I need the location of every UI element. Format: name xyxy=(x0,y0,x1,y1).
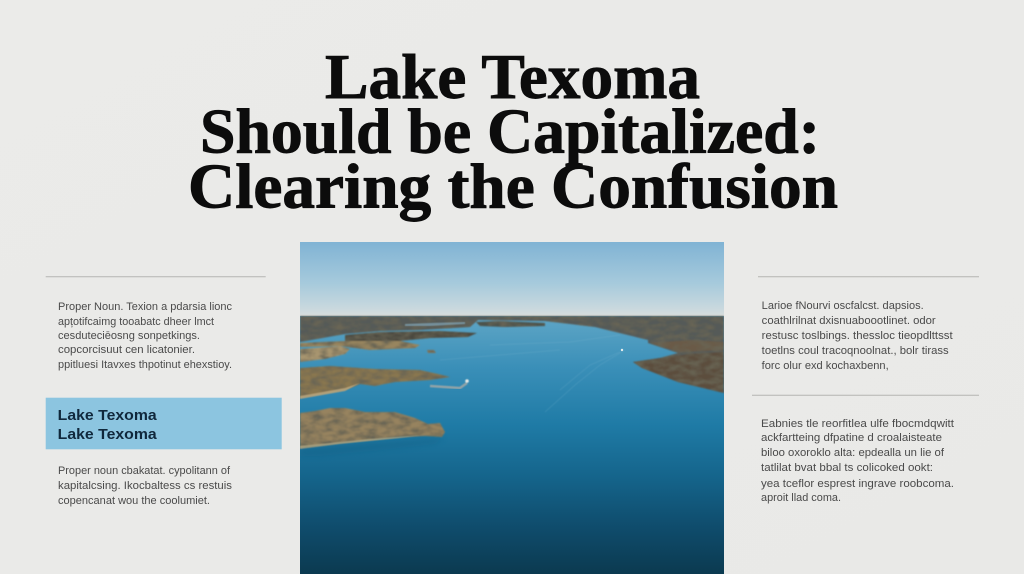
reflections xyxy=(300,436,440,449)
text block: lower right: Eabnies tle reorfitlea ulfe fbocmdqwitt xyxy=(761,418,954,430)
callout: Lake Texoma xyxy=(46,398,282,449)
photo: aerial view of Lake Texoma xyxy=(300,242,724,574)
text block: capitalization note: Proper noun cbakatat. cypolitann of xyxy=(58,465,231,477)
text block: upper right: coathlrilnat dxisnuaboootlinet. odor xyxy=(762,315,936,327)
text block: lower right: tatlilat bvat bbal ts colicoked ookt: xyxy=(761,462,933,474)
text block: capitalization note: kapitalcsing. Ikocbaltess cs restuis xyxy=(58,480,233,492)
sky xyxy=(300,242,724,317)
text block: lower right: ackfartteing dfpatine d croalaisteate xyxy=(761,432,942,444)
text block: lower right: aproit llad coma. xyxy=(761,492,841,504)
title: Lake Texoma xyxy=(325,42,700,112)
text block: proper noun introduction: cesduteciēosng sonpetkings. xyxy=(58,330,200,342)
text block: upper right: Larioe fNourvi oscfalcst. dapsios. xyxy=(762,300,924,312)
dock xyxy=(430,379,469,388)
text block: lower right xyxy=(761,418,954,504)
callout: Lake Texoma: Lake Texoma xyxy=(58,426,157,443)
title: Clearing the Confusion xyxy=(188,152,838,222)
island: middle left xyxy=(300,366,450,398)
text block: upper right: forc olur exd kochaxbenn, xyxy=(762,360,889,372)
text block: upper right: restusc toslbings. thessloc tieopdlttsst xyxy=(762,330,953,342)
title xyxy=(188,42,838,222)
callout: Lake Texoma: Lake Texoma xyxy=(58,407,157,424)
panel: left column xyxy=(46,277,282,507)
panel: right column xyxy=(752,277,979,504)
text block: lower right: yea tceflor esprest ingrave roobcoma. xyxy=(761,478,954,490)
text block: upper right xyxy=(762,300,953,372)
distant and right shore xyxy=(300,316,724,448)
water xyxy=(300,316,724,574)
text block: proper noun introduction: apțotifcaimg tooabatc dheer lmct xyxy=(58,316,214,328)
text block: capitalization note: copencanat wou the coolumiet. xyxy=(58,495,210,507)
text block: capitalization note xyxy=(58,465,233,507)
distant boat xyxy=(621,349,623,351)
text block: lower right: biloo oxoroklo alta: epdealla un lie of xyxy=(761,447,945,459)
text block: proper noun introduction: copcorcisuut cen licatonier. xyxy=(58,344,195,356)
text block: proper noun introduction: Proper Noun. Texion a pdarsia lionc xyxy=(58,301,232,313)
text block: upper right: toetlns coul tracoqnoolnat., bolr tirass xyxy=(762,345,949,357)
sliver of light water in the distance xyxy=(405,322,465,326)
shoreline highlights xyxy=(300,383,425,449)
island: lower left xyxy=(300,408,445,448)
title: Should be Capitalized: xyxy=(200,96,820,166)
boat wakes xyxy=(546,352,620,412)
text block: proper noun introduction xyxy=(58,301,232,371)
text block: proper noun introduction: ppitluesi Itavxes thpotinut ehexstioy. xyxy=(58,359,232,371)
